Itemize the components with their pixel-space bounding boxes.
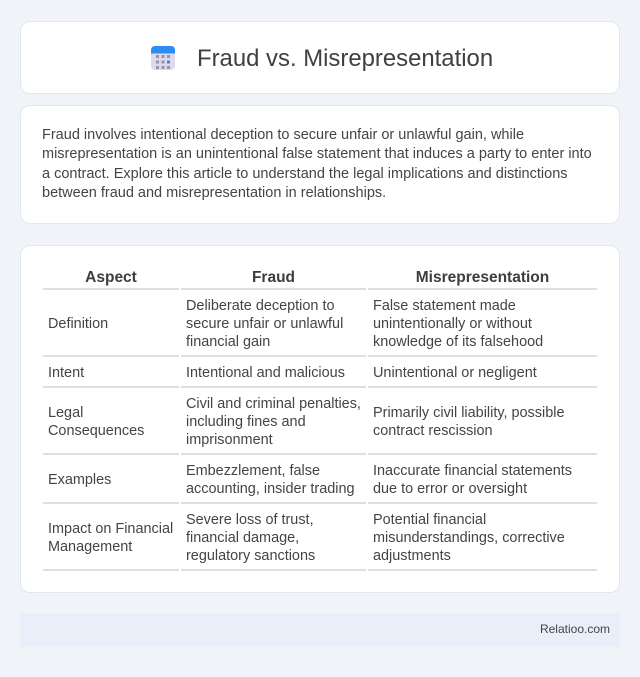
row: Legal Consequences: Primarily civil liability, possible <box>373 405 564 421</box>
row: Legal Consequences: Legal <box>48 405 83 421</box>
row: Legal Consequences: contract rescission <box>373 423 493 439</box>
row: Impact on Financial Management: financial damage, <box>186 530 299 546</box>
row: Legal Consequences <box>48 396 564 448</box>
row: Impact on Financial Management: misunderstandings, corrective <box>373 530 565 546</box>
row: Intent <box>48 365 537 381</box>
row: Legal Consequences: Consequences <box>48 423 144 439</box>
comparison table <box>43 269 597 571</box>
row: Definition: Deliberate deception to <box>186 298 334 314</box>
title: Fraud vs. Misrepresentation <box>197 45 493 72</box>
column heading: Fraud: Fraud <box>252 269 295 286</box>
text block: introduction: a contract. Explore this article to understand the legal implications and distinctions <box>42 166 568 182</box>
row: Definition: secure unfair or unlawful <box>186 316 343 332</box>
column heading: Aspect: Aspect <box>85 269 137 286</box>
row: Definition <box>48 298 543 350</box>
row: Definition: unintentionally or without <box>373 316 532 332</box>
column heading: Misrepresentation: Misrepresentation <box>416 269 549 286</box>
row: Intent: Unintentional or negligent <box>373 365 537 381</box>
row: Impact on Financial Management: regulatory sanctions <box>186 548 315 564</box>
row: Intent: Intentional and malicious <box>186 365 345 381</box>
row: Definition: financial gain <box>186 334 270 350</box>
row: Legal Consequences: imprisonment <box>186 432 273 448</box>
footer bar <box>20 613 620 647</box>
row: Examples: due to error or oversight <box>373 481 527 497</box>
row: Examples: Embezzlement, false <box>186 463 320 479</box>
row: Examples: Inaccurate financial statements <box>373 463 572 479</box>
text block: introduction: between fraud and misrepresentation in relationships. <box>42 185 386 201</box>
row: Impact on Financial Management: adjustments <box>373 548 451 564</box>
row: Legal Consequences: Civil and criminal penalties, <box>186 396 361 412</box>
row: Definition: False statement made <box>373 298 516 314</box>
row: Intent: Intent <box>48 365 84 381</box>
text block: introduction: misrepresentation is an unintentional false statement that induces a party to enter into <box>42 146 592 162</box>
panel: title card <box>20 21 620 94</box>
panel: introduction card <box>20 105 620 224</box>
row: Examples: Examples <box>48 472 111 488</box>
row: Impact on Financial Management: Severe loss of trust, <box>186 512 314 528</box>
row: Legal Consequences: including fines and <box>186 414 306 430</box>
row: Examples <box>48 463 572 497</box>
text block: introduction <box>42 126 592 201</box>
row: Examples: accounting, insider trading <box>186 481 355 497</box>
footer credit: Relatioo.com <box>540 622 610 636</box>
row: Definition: knowledge of its falsehood <box>373 334 543 350</box>
row: Impact on Financial Management <box>48 512 565 564</box>
icon: calendar <box>151 46 175 70</box>
text block: introduction: Fraud involves intentional deception to secure unfair or unlawful gain, while <box>42 126 524 142</box>
row: Impact on Financial Management: Management <box>48 539 132 555</box>
row: Impact on Financial Management: Potential financial <box>373 512 486 528</box>
row: Impact on Financial Management: Impact on Financial <box>48 521 173 537</box>
panel: comparison table card <box>20 245 620 593</box>
row: Definition: Definition <box>48 316 108 332</box>
